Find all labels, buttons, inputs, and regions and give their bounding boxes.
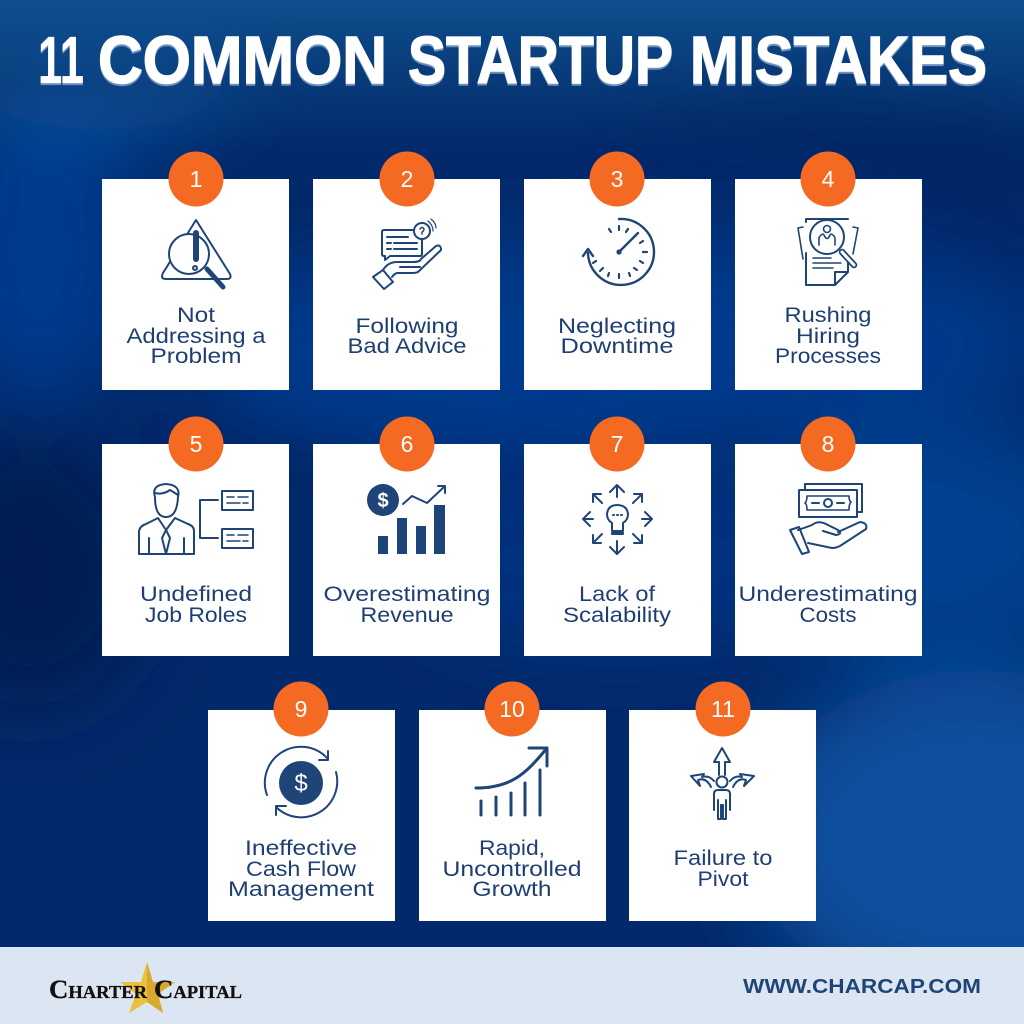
card 4: rushing hiring processes: Processes <box>775 345 881 368</box>
card 6: overestimating revenue: Revenue <box>360 604 454 627</box>
icon: hand holding speech bubble <box>373 219 441 289</box>
card 8: underestimating costs: Underestimating <box>738 583 918 606</box>
icon: hand holding money <box>790 484 866 554</box>
card 5: undefined job roles <box>102 416 289 656</box>
card 2: following bad advice <box>313 152 500 390</box>
card 11: failure to pivot <box>629 682 816 921</box>
card 8: underestimating costs: Costs <box>800 604 856 627</box>
card 1: not addressing a problem: Problem <box>150 345 242 368</box>
title <box>38 23 987 100</box>
card 9: ineffective cash flow management: Cash Flow <box>246 858 357 881</box>
card 3: neglecting downtime: Downtime <box>560 335 674 358</box>
title: 11 <box>38 25 84 100</box>
title: STARTUP <box>408 25 673 100</box>
card 10: rapid uncontrolled growth <box>419 682 606 921</box>
icon: gold star <box>120 962 175 1013</box>
card 11: failure to pivot: 11 <box>711 696 735 722</box>
card 9: ineffective cash flow management: Management <box>228 878 374 901</box>
icon: light bulb with arrows <box>583 485 652 554</box>
card 11: failure to pivot: Failure to <box>674 847 772 870</box>
icon: person with role boxes <box>139 484 253 554</box>
card 1: not addressing a problem <box>102 152 289 390</box>
title: COMMON <box>98 25 387 100</box>
card 10: rapid uncontrolled growth: Uncontrolled <box>442 858 582 881</box>
icon: resume under magnifier <box>798 219 858 285</box>
logo: charter capital: Charter <box>49 975 148 1004</box>
card 5: undefined job roles: 5 <box>190 431 202 457</box>
card 7: lack of scalability: 7 <box>611 431 623 457</box>
icon: person with three arrows <box>691 748 754 819</box>
card 1: not addressing a problem: 1 <box>190 166 202 192</box>
card 4: rushing hiring processes: Hiring <box>796 325 860 348</box>
card 4: rushing hiring processes: 4 <box>822 166 835 192</box>
title: STARTUP <box>408 23 673 98</box>
card 1: not addressing a problem: Not <box>177 304 215 327</box>
card 8: underestimating costs: 8 <box>822 431 834 457</box>
card 2: following bad advice: Following <box>356 315 458 338</box>
card 5: undefined job roles: Job Roles <box>145 604 247 627</box>
title: MISTAKES <box>690 23 987 98</box>
card 6: overestimating revenue: 6 <box>401 431 413 457</box>
card 7: lack of scalability: Scalability <box>563 604 672 627</box>
icon: dollar and bar chart <box>367 484 445 554</box>
card 10: rapid uncontrolled growth: Growth <box>472 878 552 901</box>
icon: growth curve and bars <box>476 748 547 815</box>
logo: charter capital <box>49 962 242 1013</box>
card 3: neglecting downtime: 3 <box>611 166 623 192</box>
card 2: following bad advice: 2 <box>401 166 413 192</box>
card 4: rushing hiring processes <box>735 152 922 390</box>
title: MISTAKES <box>690 25 987 100</box>
card 3: neglecting downtime <box>524 152 711 390</box>
card 4: rushing hiring processes: Rushing <box>784 304 872 327</box>
footer band <box>0 947 1024 1024</box>
card 9: ineffective cash flow management: 9 <box>295 696 307 722</box>
card 9: ineffective cash flow management <box>208 682 395 921</box>
icon: stopwatch with arrow <box>583 219 654 285</box>
card 11: failure to pivot: Pivot <box>698 868 749 891</box>
title: 11 <box>38 23 84 98</box>
icon: dollar and bar chart: $ <box>377 490 389 512</box>
card 1: not addressing a problem: Addressing a <box>126 325 266 348</box>
card 8: underestimating costs <box>735 416 922 656</box>
card 10: rapid uncontrolled growth: 10 <box>499 696 525 722</box>
card 10: rapid uncontrolled growth: Rapid, <box>479 837 545 860</box>
logo: charter capital: Capital <box>154 975 242 1004</box>
icon: warning magnifier <box>162 220 231 287</box>
card 9: ineffective cash flow management: Ineffective <box>245 837 357 860</box>
card 7: lack of scalability: Lack of <box>579 583 655 606</box>
card 2: following bad advice: Bad Advice <box>348 335 466 358</box>
icon: dollar in cycle arrows: $ <box>294 770 308 797</box>
icon: dollar in cycle arrows <box>265 747 337 817</box>
card 3: neglecting downtime: Neglecting <box>558 315 676 338</box>
card 7: lack of scalability <box>524 416 711 656</box>
card 6: overestimating revenue: Overestimating <box>324 583 490 606</box>
card 5: undefined job roles: Undefined <box>140 583 252 606</box>
card 6: overestimating revenue <box>313 416 500 656</box>
title: COMMON <box>98 23 387 98</box>
website url: WWW.CHARCAP.COM <box>743 975 981 998</box>
